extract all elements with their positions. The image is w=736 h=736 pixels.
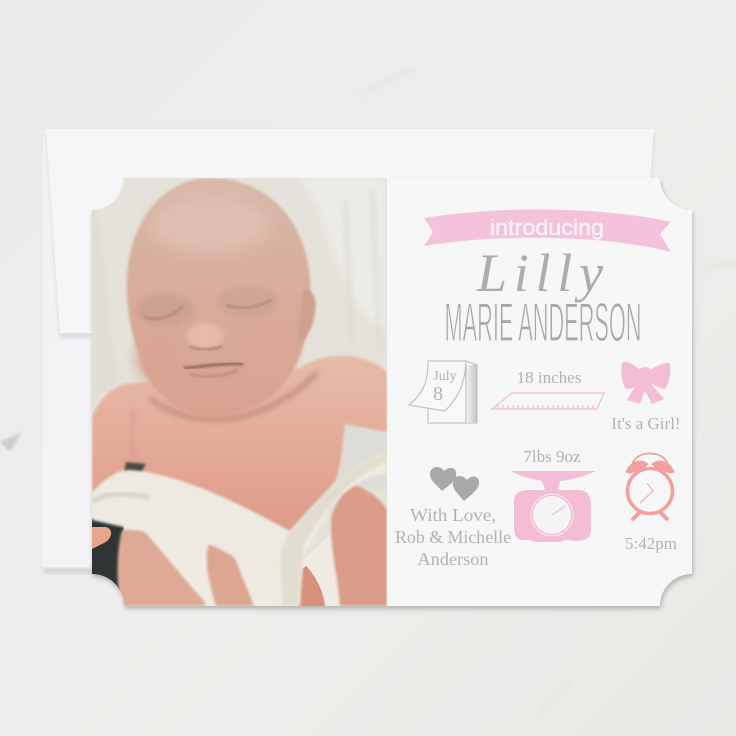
text: 18 inches: 18 inches — [517, 368, 581, 387]
text: with love: Anderson — [418, 549, 488, 569]
baby head — [127, 178, 311, 416]
white cloth under hands — [148, 533, 340, 606]
icon: calendar: 8 — [433, 383, 443, 405]
name: Lilly: Lilly — [476, 243, 603, 303]
hands — [92, 527, 111, 549]
text: with love — [395, 505, 511, 569]
text: It's a Girl!: It's a Girl! — [611, 414, 681, 433]
text: weight: 7lbs 9oz — [523, 447, 581, 466]
envelope — [43, 129, 654, 574]
bedding folds — [306, 180, 384, 317]
text: with love: With Love, — [410, 505, 496, 525]
icon: scale — [511, 471, 596, 542]
baby photo — [92, 178, 387, 606]
text: with love: Rob & Michelle — [395, 527, 511, 547]
blanket band — [92, 453, 387, 606]
name: Marie Anderson: MARIE ANDERSON — [444, 292, 642, 353]
text: time: 5:42pm — [625, 534, 677, 553]
icon: hearts — [430, 467, 479, 501]
icon: pink bow — [621, 362, 670, 404]
icon: ruler — [492, 393, 604, 409]
dark gap — [92, 518, 124, 592]
icon: calendar: July — [433, 369, 457, 384]
ribbon banner — [424, 209, 671, 252]
baby body — [92, 356, 387, 540]
card with notched corners — [92, 178, 693, 609]
ear — [300, 290, 317, 340]
facial shading — [139, 295, 191, 326]
icon: alarm clock — [626, 454, 674, 520]
heading: introducing: introducing — [490, 215, 604, 240]
icon: calendar — [409, 361, 477, 423]
